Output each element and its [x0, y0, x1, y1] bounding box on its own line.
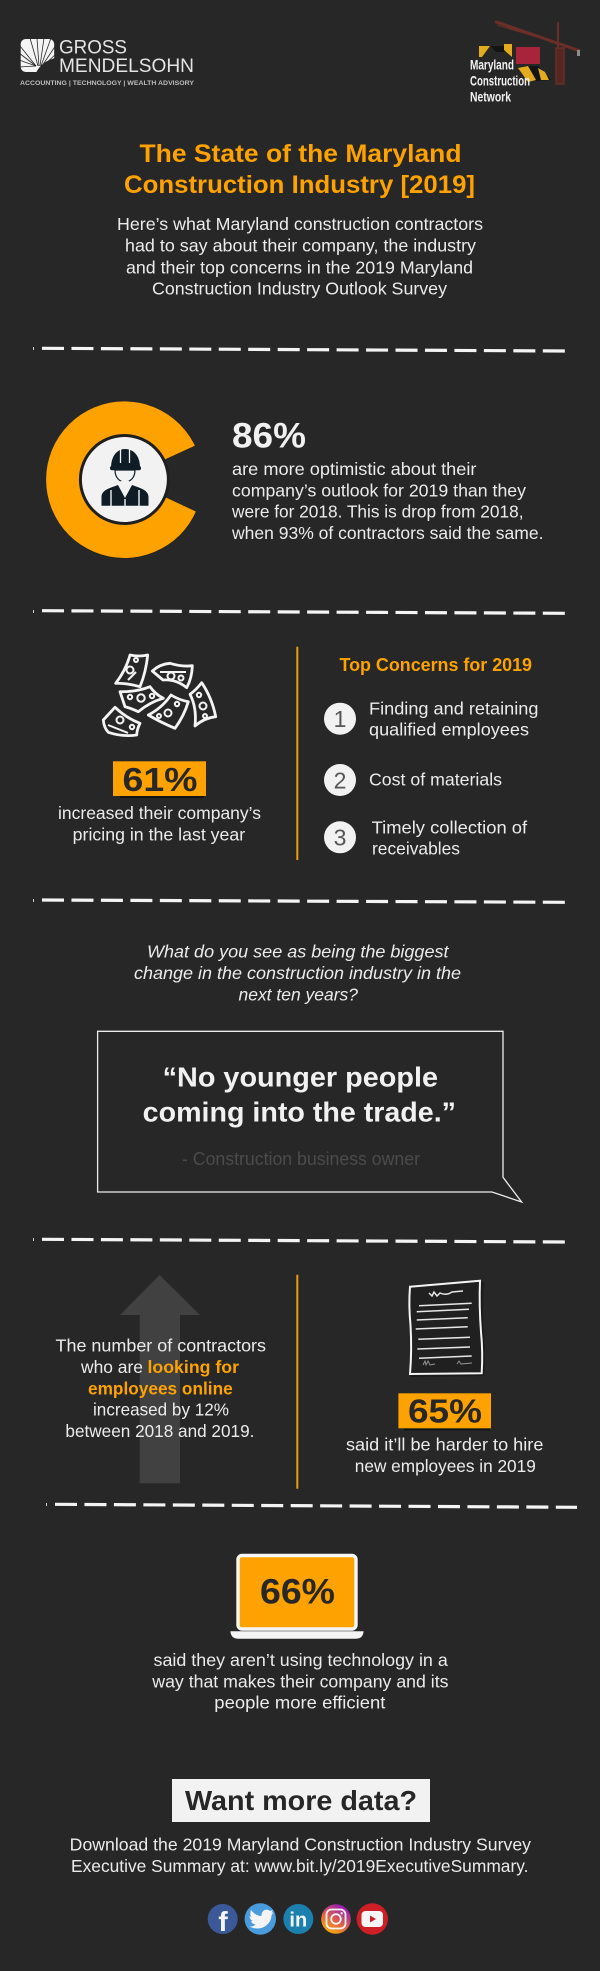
concern 3: receivables: [372, 838, 460, 858]
question text: What do you see as being the biggest: [147, 942, 450, 962]
pricing text: increased their company’s: [58, 803, 261, 823]
panel: 86% optimistic: [46, 401, 543, 559]
icon: LinkedIn: [283, 1904, 313, 1934]
technology text: way that makes their company and its: [151, 1671, 449, 1691]
description text: were for 2018. This is drop from 2018,: [231, 502, 523, 522]
heading: Want more data: [172, 1779, 430, 1822]
logo wordmark: GROSS: [59, 36, 127, 58]
icon: up arrow: [120, 1275, 200, 1483]
pricing text: pricing in the last year: [73, 825, 245, 845]
concern 3: 3: [334, 825, 346, 851]
description text: company’s outlook for 2019 than they: [232, 480, 526, 500]
description text: are more optimistic about their: [232, 459, 477, 479]
concern 2: Cost of materials: [369, 770, 502, 790]
panel: pricing 61%: [58, 655, 261, 845]
hiring text: [346, 1435, 543, 1476]
icon: construction worker: [102, 449, 148, 506]
online hiring text: looking for: [148, 1357, 239, 1377]
logo wordmark second line: MENDELSOHN: [59, 55, 194, 77]
stat: 66%: 66%: [260, 1572, 335, 1611]
technology text: [151, 1650, 449, 1713]
quote line 2: coming into the trade.”: [143, 1096, 456, 1127]
hiring text: said it’ll be harder to hire: [346, 1435, 543, 1455]
icon: Instagram: [321, 1904, 351, 1934]
stat box: 61%: 61%: [122, 761, 198, 798]
icon: laptop with stat: [230, 1556, 364, 1639]
intro text: Here’s what Maryland construction contractors: [117, 214, 483, 234]
online hiring text: The number of contractors: [56, 1336, 266, 1356]
stat box: 65%: 65%: [408, 1393, 482, 1430]
online hiring text: who are: [80, 1357, 143, 1377]
download text: Download the 2019 Maryland Construction Industry Survey: [70, 1835, 531, 1855]
intro text: [117, 214, 483, 299]
callout: quote bubble: [98, 1031, 522, 1202]
social icons: [208, 1903, 388, 1937]
description text: when 93% of contractors said the same.: [231, 523, 544, 543]
concern 3: Timely collection of: [372, 817, 527, 837]
intro text: had to say about their company, the industry: [125, 236, 476, 256]
intro text: and their top concerns in the 2019 Maryland: [126, 257, 473, 277]
title line 1: The State of the Maryland: [140, 140, 462, 168]
concern 1: Finding and retaining: [369, 698, 538, 718]
icon: YouTube: [357, 1903, 388, 1935]
online hiring text: employees online: [88, 1378, 233, 1398]
heading: Want more data: Want more data?: [185, 1785, 417, 1816]
panel: technology 66%: [151, 1556, 449, 1713]
logo tagline: ACCOUNTING | TECHNOLOGY | WEALTH ADVISORY: [20, 80, 194, 87]
Maryland label: Maryland: [470, 56, 514, 72]
title line 2: Construction Industry [2019]: [124, 171, 475, 199]
icon: Maryland flag shape: [479, 44, 551, 82]
quote line 1: “No younger people: [163, 1062, 438, 1093]
icon: Facebook: [208, 1904, 238, 1937]
download text: [70, 1835, 531, 1876]
Construction label: Construction: [470, 73, 530, 89]
stat: 86%: 86%: [232, 416, 306, 455]
hiring text: new employees in 2019: [355, 1456, 536, 1476]
pricing text: [58, 803, 261, 845]
concern 2: [324, 764, 502, 796]
icon: Facebook: f: [218, 1906, 228, 1937]
question text: change in the construction industry in the: [134, 963, 461, 983]
concern 1: qualified employees: [369, 720, 529, 740]
logo: Maryland Construction Network: [470, 22, 580, 105]
heading: Top Concerns for 2019: [340, 655, 532, 675]
concern 2: 2: [334, 768, 346, 794]
online hiring text: between 2018 and 2019.: [65, 1421, 254, 1441]
question text: [134, 942, 461, 1004]
question text: next ten years?: [238, 984, 358, 1004]
online hiring text: [56, 1336, 266, 1441]
Network label: Network: [470, 89, 511, 105]
title: [124, 140, 475, 199]
icon: flying money: [103, 655, 216, 736]
technology text: said they aren’t using technology in a: [154, 1650, 448, 1670]
download text: Executive Summary at: www.bit.ly/2019ExecutiveSummary.: [71, 1856, 528, 1876]
logo: Gross Mendelsohn: [19, 36, 194, 87]
description text: [231, 459, 544, 543]
concern 3: [324, 817, 527, 858]
icon: Twitter: [245, 1903, 276, 1935]
icon: crane: [495, 22, 580, 84]
icon: document: [409, 1281, 485, 1377]
icon: sunburst mark: [19, 38, 56, 73]
panel: top concerns: [324, 655, 538, 858]
concern 1: [324, 698, 538, 740]
intro text: Construction Industry Outlook Survey: [152, 279, 447, 299]
online hiring text: increased by 12%: [93, 1400, 229, 1420]
attribution: - Construction business owner: [182, 1149, 420, 1169]
icon: LinkedIn: in: [289, 1910, 307, 1932]
panel: harder to hire 65%: [346, 1281, 543, 1476]
stat box: 65%: [398, 1393, 491, 1430]
technology text: people more efficient: [214, 1693, 386, 1713]
chart: 86% ring with worker: [46, 401, 216, 559]
panel: looking for employees online: [56, 1275, 266, 1483]
concern 1: 1: [334, 706, 346, 732]
